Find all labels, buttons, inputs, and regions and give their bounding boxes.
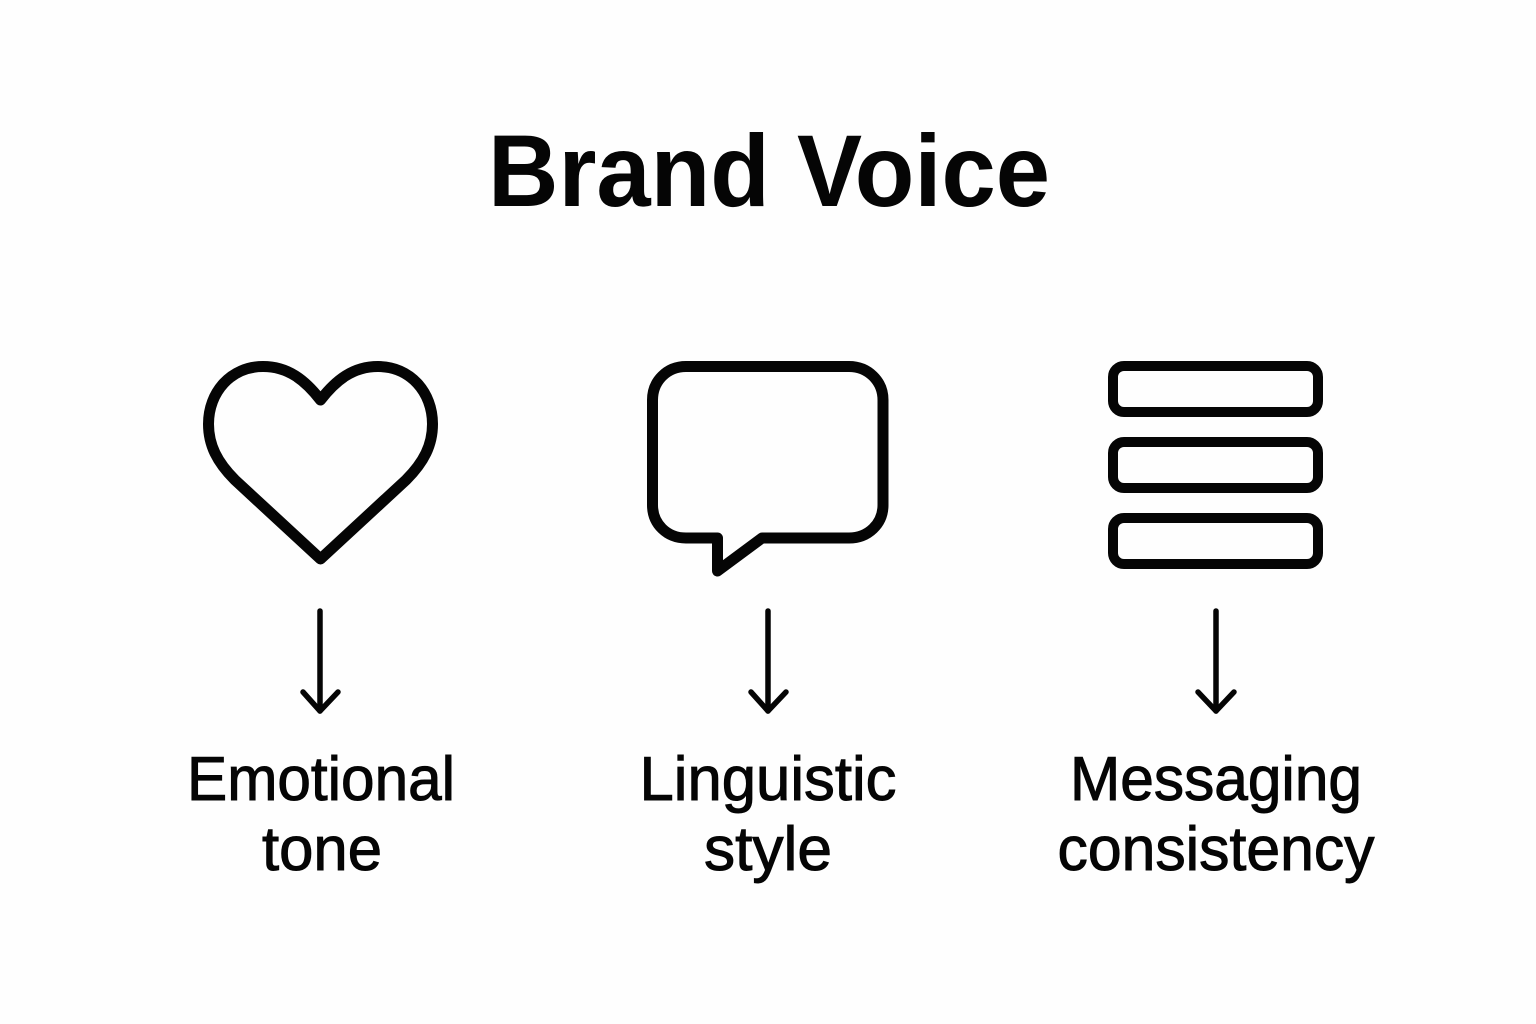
label: messaging consistency: Messaging bbox=[1070, 745, 1362, 814]
title: Brand Voice bbox=[488, 114, 1050, 228]
arrow: linguistic style bbox=[751, 611, 786, 711]
icon: heart bbox=[208, 366, 432, 559]
label: emotional tone: tone bbox=[262, 815, 382, 884]
label: emotional tone bbox=[187, 745, 455, 884]
icon: stacked bars bbox=[1113, 366, 1318, 564]
label: linguistic style bbox=[640, 745, 896, 884]
arrow: messaging consistency bbox=[1198, 611, 1234, 711]
label: emotional tone: Emotional bbox=[187, 745, 455, 814]
label: messaging consistency: consistency bbox=[1058, 815, 1374, 884]
arrow: emotional tone bbox=[303, 611, 338, 711]
label: linguistic style: style bbox=[704, 815, 832, 884]
label: linguistic style: Linguistic bbox=[640, 745, 896, 814]
icon: speech bubble bbox=[652, 366, 883, 571]
label: messaging consistency bbox=[1058, 745, 1374, 884]
